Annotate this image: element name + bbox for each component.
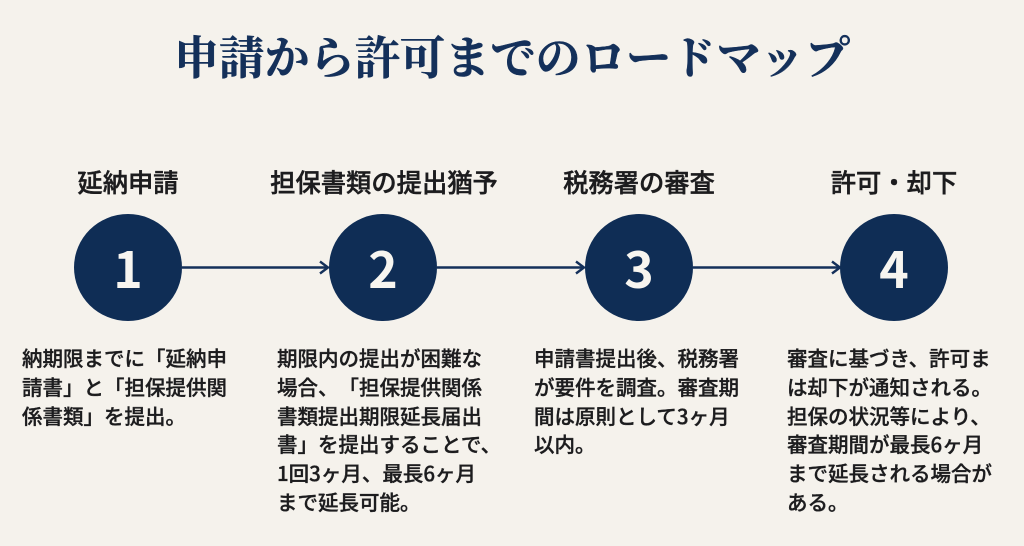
- arrow: step 3 to 4: [693, 262, 840, 274]
- text: step 4 description: 審査に基づき、許可ま: [787, 342, 991, 372]
- text: step 4 description: まで延長される場合が: [787, 457, 992, 487]
- step 2 number circle: [329, 214, 437, 320]
- text: step 2 description: 1回3ヶ月、最長6ヶ月: [277, 457, 476, 487]
- text: step 1 description: 係書類」を提出。: [22, 400, 186, 430]
- text: step 2 description: 書」を提出することで、: [277, 428, 501, 458]
- step 1 number circle: [74, 214, 182, 320]
- step 3 number circle: 3: [624, 230, 654, 302]
- heading: step 1: 延納申請: [77, 164, 179, 200]
- heading: step 2: 担保書類の提出猶予: [270, 164, 498, 200]
- arrow: step 2 to 3: [437, 262, 584, 274]
- text: step 3 description: が要件を調査。審査期: [534, 371, 739, 401]
- step 2 number circle: 2: [368, 230, 398, 302]
- text: step 4 description: 担保の状況等により、: [787, 400, 991, 430]
- text: step 4 description: [787, 342, 992, 516]
- text: step 3 description: 以内。: [534, 428, 596, 458]
- title: 申請から許可までのロードマップ: [174, 22, 850, 87]
- step 4 number circle: [840, 214, 948, 320]
- text: step 2 description: 書類提出期限延長届出: [277, 400, 482, 430]
- text: step 1 description: 請書」と「担保提供関: [22, 371, 227, 401]
- step 3 number circle: [585, 214, 693, 320]
- text: step 2 description: [277, 342, 501, 516]
- text: step 1 description: [22, 342, 227, 430]
- text: step 3 description: [534, 342, 739, 458]
- text: step 2 description: まで延長可能。: [277, 486, 420, 516]
- text: step 2 description: 場合、「担保提供関係: [277, 371, 482, 401]
- text: step 2 description: 期限内の提出が困難な: [277, 342, 482, 372]
- text: step 3 description: 申請書提出後、税務署: [534, 342, 739, 372]
- text: step 3 description: 間は原則として3ヶ月: [534, 400, 730, 430]
- heading: step 3: 税務署の審査: [563, 164, 715, 200]
- text: step 4 description: は却下が通知される。: [787, 371, 992, 401]
- arrow: step 1 to 2: [182, 262, 328, 274]
- text: step 4 description: 審査期間が最長6ヶ月: [787, 428, 983, 458]
- step 4 number circle: 4: [879, 230, 909, 302]
- heading: step 4: 許可・却下: [831, 164, 957, 200]
- step 1 number circle: 1: [113, 230, 143, 302]
- text: step 4 description: ある。: [787, 486, 848, 516]
- text: step 1 description: 納期限までに「延納申: [22, 342, 227, 372]
